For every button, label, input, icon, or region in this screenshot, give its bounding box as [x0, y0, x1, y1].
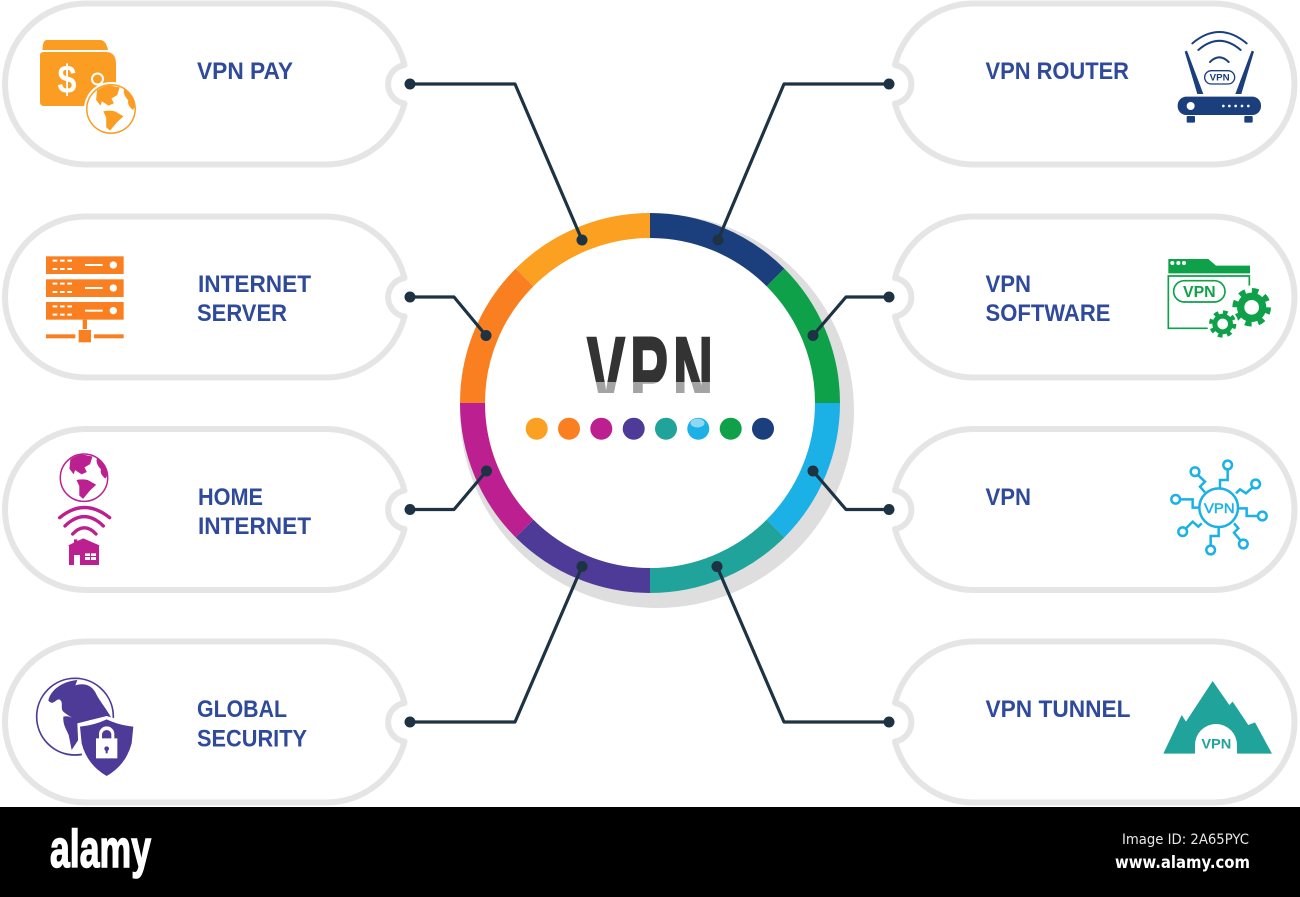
colour dots row — [526, 418, 774, 440]
panel: VPN — [895, 429, 1294, 590]
heading: Global Security: GLOBAL — [197, 696, 287, 723]
heading: VPN Software: VPN — [986, 271, 1031, 298]
title: VPN: N — [673, 317, 713, 429]
ring segment: VPN — [776, 403, 828, 529]
icon: router: VPN — [1210, 72, 1230, 82]
heading: VPN Tunnel: VPN TUNNEL — [986, 696, 1130, 723]
footer bar — [0, 807, 1300, 897]
ring segment: VPN Pay — [524, 226, 650, 277]
connector: VPN Pay — [404, 78, 588, 246]
heading: VPN Software: SOFTWARE — [986, 300, 1110, 327]
title: VPN: V — [587, 317, 625, 429]
icon: software window with gears: VPN — [1183, 284, 1216, 301]
icon: mountain tunnel: VPN — [1201, 735, 1231, 751]
icon: globe, wifi and house — [60, 454, 110, 565]
icon: server rack — [46, 256, 124, 342]
panel: VPN Router — [895, 3, 1294, 165]
ring segment: Internet Server — [472, 277, 524, 403]
connector: Home Internet — [404, 466, 492, 515]
title: VPN: P — [630, 317, 668, 429]
panel: Global Security — [5, 641, 405, 803]
heading: Home Internet: HOME — [198, 484, 263, 511]
ring segment: VPN Tunnel — [650, 529, 776, 580]
ring segment: Global Security — [524, 529, 650, 580]
connector: VPN — [808, 466, 894, 515]
heading: Home Internet: INTERNET — [198, 513, 311, 540]
connector: VPN Software — [808, 292, 894, 341]
icon: VPN network hub — [1171, 461, 1267, 554]
heading: VPN Pay: VPN PAY — [197, 58, 293, 85]
ring segment: VPN Software — [776, 277, 828, 403]
footer image id: Image ID: 2A65PYC — [1122, 832, 1249, 848]
panel: Home Internet — [5, 429, 405, 590]
footer logo: alamy: alamy — [50, 820, 151, 879]
icon: mountain tunnel — [1163, 681, 1272, 754]
heading: Global Security: SECURITY — [197, 726, 307, 752]
icon: router — [1178, 32, 1261, 123]
heading: VPN Router: VPN ROUTER — [986, 58, 1129, 85]
panel: VPN Software — [895, 216, 1294, 378]
footer url: www.alamy.com — [1115, 853, 1250, 872]
icon: VPN network hub: VPN — [1204, 500, 1235, 516]
centre ring shadow — [460, 214, 854, 608]
icon: wallet with globe — [40, 40, 138, 136]
ring segment: Home Internet — [472, 403, 524, 529]
heading: VPN: VPN — [986, 484, 1031, 511]
ring segment: VPN Router — [650, 226, 776, 277]
panel: Internet Server — [5, 216, 405, 378]
connector: Internet Server — [404, 292, 492, 341]
connector: VPN Tunnel — [712, 561, 894, 728]
panel: VPN Pay — [5, 3, 405, 165]
heading: Internet Server: SERVER — [197, 300, 287, 327]
connector: VPN Router — [712, 78, 894, 246]
heading: Internet Server: INTERNET — [198, 271, 311, 298]
connector: Global Security — [404, 561, 588, 728]
icon: software window with gears — [1168, 259, 1274, 340]
icon: globe with shield and padlock — [37, 678, 137, 779]
centre ring — [472, 225, 828, 581]
panel: VPN Tunnel — [895, 641, 1294, 803]
icon: wallet with globe: $ — [58, 58, 76, 102]
